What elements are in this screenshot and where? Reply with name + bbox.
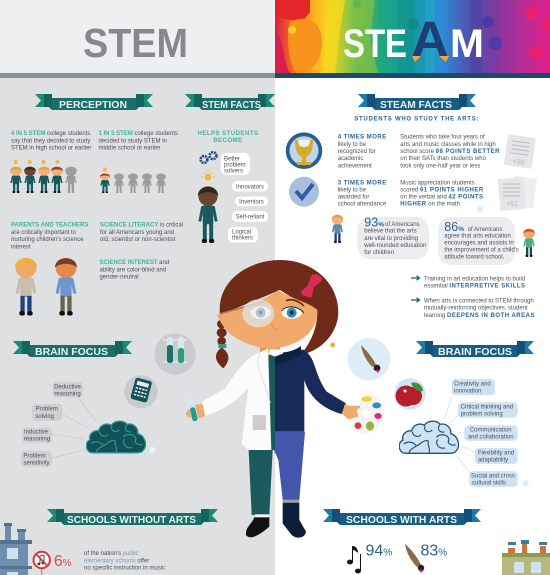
- text block: 4 times more: likely to be: [338, 142, 367, 148]
- icon: light bulb: [201, 170, 215, 180]
- face: [217, 290, 317, 349]
- bubble: logical thinkers: Logical: [232, 230, 251, 236]
- palette: [353, 395, 384, 434]
- icon: person right of 86 percent: [523, 229, 535, 257]
- text block: 4 in 5 STEM: STEM in high school or earlier: [11, 146, 91, 152]
- ribbon: stem facts: [185, 94, 275, 111]
- text block: music appreciation: [400, 180, 484, 208]
- tag: inductive reasoning: [22, 428, 52, 443]
- rainbow paint header: [275, 0, 550, 78]
- text block: 1 in 5 STEM: [98, 131, 178, 152]
- ribbon: perception: PERCEPTION: [59, 99, 127, 111]
- tag: communication: [464, 425, 518, 441]
- heading: helps students become: BECOME: [213, 138, 243, 144]
- bubble: 93 percent: are vital to providing: [364, 236, 418, 242]
- text block: 1 in 5 STEM: decided to study STEM in: [98, 138, 167, 144]
- arrow: interpretive skills: [411, 276, 420, 280]
- background: left STEM panel: [0, 0, 275, 575]
- bubble: 86 percent: the improvement of a child's: [444, 247, 519, 253]
- tag: inductive reasoning: Inductive: [24, 430, 49, 436]
- tag: creativity and innovation: [452, 379, 495, 395]
- turtleneck: [275, 346, 302, 365]
- text block: 3 times more: school attendance: [338, 202, 387, 208]
- ribbon: steam facts: [358, 94, 476, 111]
- braid: [216, 320, 228, 368]
- ribbon: schools without arts: SCHOOLS WITHOUT ARTS: [67, 514, 196, 526]
- neck: [260, 345, 280, 357]
- icon: student figure: [198, 186, 218, 243]
- text block: 4 times more: recognized for: [338, 149, 376, 155]
- text block: science interest: [100, 260, 169, 281]
- left eye: [251, 306, 271, 319]
- title: STEAM: M: [450, 22, 484, 66]
- right boot: [283, 503, 306, 538]
- bubble: 93 percent: of Americans: [385, 222, 420, 228]
- text block: deepens in both areas: [424, 298, 535, 319]
- bubble: inventors: Inventors: [239, 200, 264, 206]
- icon: teacher: [55, 258, 77, 316]
- text block: 4 times more: 4 TIMES MORE: [338, 135, 387, 141]
- ribbon: stem facts: STEM FACTS: [202, 99, 261, 111]
- text block: interpretive skills: Training in art education helps to build: [424, 276, 525, 282]
- text block: 3 times more: [338, 180, 387, 208]
- text block: 4 times more: [338, 135, 387, 170]
- text block: science literacy: [100, 223, 183, 243]
- tag: problem sensitivity: sensitivity: [23, 461, 50, 467]
- ribbon: schools with arts: SCHOOLS WITH ARTS: [346, 514, 457, 526]
- hair: [220, 260, 338, 355]
- tag: problem solving: [32, 404, 62, 421]
- icon: no music sign: [34, 552, 50, 575]
- text block: parents and teachers: nurturing children's science: [11, 237, 84, 243]
- ribbon: brain focus right: BRAIN FOCUS: [438, 346, 512, 358]
- tag: flexibility: adaptability: [478, 457, 508, 463]
- icon: test papers 61: +61: [506, 201, 518, 208]
- bubble: 93 percent: for children: [364, 250, 394, 256]
- icon: apple: [394, 378, 426, 410]
- text block: 6 percent description: no specific instruction in music: [84, 565, 165, 571]
- tag: communication: Communication: [470, 427, 512, 433]
- text block: music appreciation: Music appreciation students: [400, 180, 475, 186]
- icon: test paper 98: [504, 134, 536, 169]
- text block: science literacy: SCIENCE LITERACY is critical: [100, 223, 183, 229]
- text block: parents and teachers: are critically important to: [11, 230, 77, 236]
- teal shirt: [268, 355, 275, 450]
- text block: science literacy: old, scientist or non-scientist: [100, 237, 176, 243]
- collar: [269, 349, 283, 357]
- icon: left brain: [86, 421, 145, 453]
- text block: deepens in both areas: learning DEEPENS IN BOTH AREAS: [424, 313, 535, 319]
- text block: science interest: ability are color-blind and: [100, 267, 166, 273]
- tag: deductive reasoning: [53, 382, 83, 398]
- bubble: better problem solvers: [221, 153, 250, 175]
- bubble: 93 percent: well-rounded education: [363, 243, 426, 249]
- right hand: [342, 404, 363, 419]
- ribbon: perception: [35, 94, 153, 111]
- ribbon: schools without arts: [47, 509, 218, 526]
- background: right STEAM panel: [275, 0, 550, 575]
- ribbon: brain focus left: [13, 341, 132, 358]
- bubble: 93 percent: [357, 216, 429, 259]
- tag: social skills: [469, 471, 518, 487]
- text block: 4 in 5 STEM: 4 IN 5 STEM college students: [11, 131, 90, 137]
- ribbon: brain focus left: BRAIN FOCUS: [35, 346, 108, 358]
- footnote marker: [477, 206, 483, 212]
- bubble: 86 percent: of Americans: [468, 227, 502, 233]
- text block: four years of arts: arts and music classes while in high: [400, 142, 496, 148]
- text block: 4 times more: achievement: [338, 164, 372, 170]
- text block: 3 times more: likely to be: [338, 188, 367, 194]
- text block: 6 percent description: [84, 551, 165, 571]
- tag: problem sensitivity: [21, 451, 52, 467]
- sock and left shoe: [246, 515, 269, 537]
- icons: 1 in 5 students: [100, 168, 166, 193]
- subheading: students who study the arts: STUDENTS WHO STUDY THE ARTS:: [354, 116, 479, 122]
- icon: trophy medal: [286, 132, 322, 169]
- title: STEM: STEM: [83, 20, 188, 66]
- icons: 4 in 5 students: [10, 160, 77, 193]
- icon: test paper 98: +98: [512, 158, 525, 167]
- ribbon: steam facts: STEAM FACTS: [380, 99, 452, 111]
- tag: deductive reasoning: Deductive: [54, 384, 82, 390]
- stat: 6 percent: 6%: [54, 553, 72, 570]
- tag: critical thinking: [458, 402, 518, 418]
- tag: communication: and collaboration: [468, 434, 514, 440]
- tag: social skills: Social and cross: [471, 473, 515, 479]
- lab coat: [202, 348, 271, 451]
- text block: four years of arts: Students who take four years of: [400, 135, 485, 141]
- arrow: deepens in both areas: [411, 298, 420, 302]
- bubble: self-reliant: [232, 211, 268, 222]
- text block: interpretive skills: essential INTERPRETIVE SKILLS: [424, 283, 526, 289]
- ribbon: brain focus right: [416, 341, 534, 358]
- icon: music notes: [347, 546, 361, 573]
- title: STEAM: STE: [343, 22, 407, 66]
- text block: parents and teachers: [11, 223, 88, 251]
- text block: 4 in 5 STEM: say that they decided to study: [11, 138, 90, 144]
- right sweater: [275, 349, 346, 432]
- icon: test papers 61: [498, 176, 537, 211]
- left pants: [249, 450, 273, 515]
- stat: 83 percent: 83%: [420, 542, 447, 560]
- fringe highlight on scientist side: [220, 302, 265, 314]
- bubble: logical thinkers: [228, 227, 258, 242]
- text block: music appreciation: scored 61 POINTS HIGHER: [400, 188, 484, 194]
- tag: problem solving: Problem: [36, 407, 58, 413]
- text block: 4 in 5 STEM: [11, 131, 91, 152]
- bubble: better problem solvers: Better: [224, 157, 240, 163]
- bow: [301, 274, 322, 297]
- bubble: inventors: [235, 196, 268, 206]
- tag: creativity and innovation: Creativity and: [454, 381, 491, 387]
- bubble: 86 percent: agree that arts education: [444, 234, 511, 240]
- test tube: [186, 396, 199, 422]
- icon: person left of 93 percent: [332, 215, 343, 243]
- right eye: [282, 300, 304, 319]
- bubble: 93 percent: 93%: [364, 216, 384, 230]
- braid band: [218, 344, 226, 348]
- text block: parents and teachers: PARENTS AND TEACHERS: [11, 223, 88, 229]
- tag: critical thinking: Critical thinking and: [461, 405, 513, 411]
- tag: critical thinking: problem solving: [461, 412, 503, 418]
- text block: 3 times more: awarded for: [338, 194, 369, 200]
- text block: four years of arts: on their SATs than students who: [400, 156, 487, 162]
- tag: deductive reasoning: reasoning: [54, 392, 81, 398]
- text block: deepens in both areas: mutually-reinforcing objectives, student: [424, 306, 528, 312]
- stat: 94 percent: 94%: [366, 542, 392, 560]
- tag: problem solving: solving: [35, 414, 54, 420]
- coat pocket: [253, 415, 266, 430]
- icon: paintbrush: [348, 338, 390, 381]
- icon: left school building: [0, 523, 32, 575]
- text block: 6 percent description: elementary schools offer: [84, 558, 149, 564]
- earring: [330, 343, 335, 347]
- lines: right brain connectors: [444, 396, 475, 473]
- icon: parent: [15, 258, 37, 316]
- bubble: self-reliant: Self-reliant: [236, 215, 265, 221]
- jeans: [274, 432, 305, 500]
- icon: calculator: [124, 375, 158, 408]
- bubble: better problem solvers: problem: [224, 163, 246, 169]
- left hand: [186, 404, 205, 419]
- icon: right brain: [399, 421, 458, 453]
- bubble: better problem solvers: solvers: [224, 169, 243, 175]
- tag: problem sensitivity: Problem: [23, 453, 46, 459]
- title: STEAM: A: [411, 11, 449, 68]
- tag: inductive reasoning: reasoning: [24, 437, 50, 443]
- heading: helps students become: [197, 131, 259, 144]
- text block: 6 percent description: of the nation's public: [84, 551, 139, 557]
- bubble: innovators: [232, 181, 268, 192]
- icon: small paintbrush: [405, 544, 424, 573]
- footnote marker: [150, 447, 156, 453]
- icon: test tubes: [154, 333, 196, 375]
- title: STEAM: [343, 11, 484, 68]
- text block: 1 in 5 STEM: middle school or earlier: [98, 146, 161, 152]
- footnote marker: [523, 480, 529, 486]
- bubble: 93 percent: believe that the arts: [364, 229, 417, 235]
- bubble: 86 percent: [438, 217, 519, 265]
- text block: four years of arts: school score 98 POINTS BETTER: [400, 149, 500, 155]
- text block: 4 times more: academic: [338, 156, 363, 162]
- ribbon: schools with arts: [323, 509, 481, 526]
- text block: deepens in both areas: When arts is connected to STEM through: [424, 298, 534, 304]
- text block: music appreciation: on the verbal and 42 POINTS: [400, 195, 484, 201]
- text block: music appreciation: HIGHER on the math: [400, 202, 460, 208]
- bubble: 86 percent: 86%: [444, 220, 464, 234]
- text block: science interest: gender-neutral: [100, 275, 139, 281]
- tag: flexibility: [475, 448, 518, 464]
- text block: 1 in 5 STEM: 1 IN 5 STEM college students: [98, 131, 178, 137]
- icon: check badge: [289, 177, 319, 207]
- lines: left brain connectors: [52, 397, 96, 458]
- text block: interpretive skills: [424, 276, 526, 289]
- icon: gears: [201, 152, 216, 163]
- text block: science interest: SCIENCE INTEREST and: [100, 260, 169, 266]
- text block: science literacy: for all Americans young and: [100, 230, 174, 236]
- tag: creativity and innovation: innovation: [454, 388, 481, 394]
- glasses lens: [242, 299, 274, 327]
- text block: four years of arts: [400, 135, 500, 170]
- bubble: 86 percent: encourages and assists in: [444, 240, 514, 246]
- text block: parents and teachers: interest: [11, 245, 31, 251]
- bubble: 86 percent: attitude toward school.: [444, 255, 505, 261]
- text block: four years of arts: took only one-half year or less: [400, 164, 480, 170]
- bubble: innovators: Innovators: [236, 184, 264, 190]
- heading: helps students become: HELPS STUDENTS: [197, 131, 259, 137]
- character: half scientist half artist girl: [186, 260, 384, 538]
- nose and smile: [272, 324, 278, 329]
- tag: social skills: cultural skills: [472, 481, 506, 487]
- bubble: logical thinkers: thinkers: [232, 236, 253, 242]
- icon: right school building: [502, 540, 550, 575]
- tag: flexibility: Flexibility and: [478, 450, 514, 456]
- text block: 3 times more: 3 TIMES MORE: [338, 180, 387, 186]
